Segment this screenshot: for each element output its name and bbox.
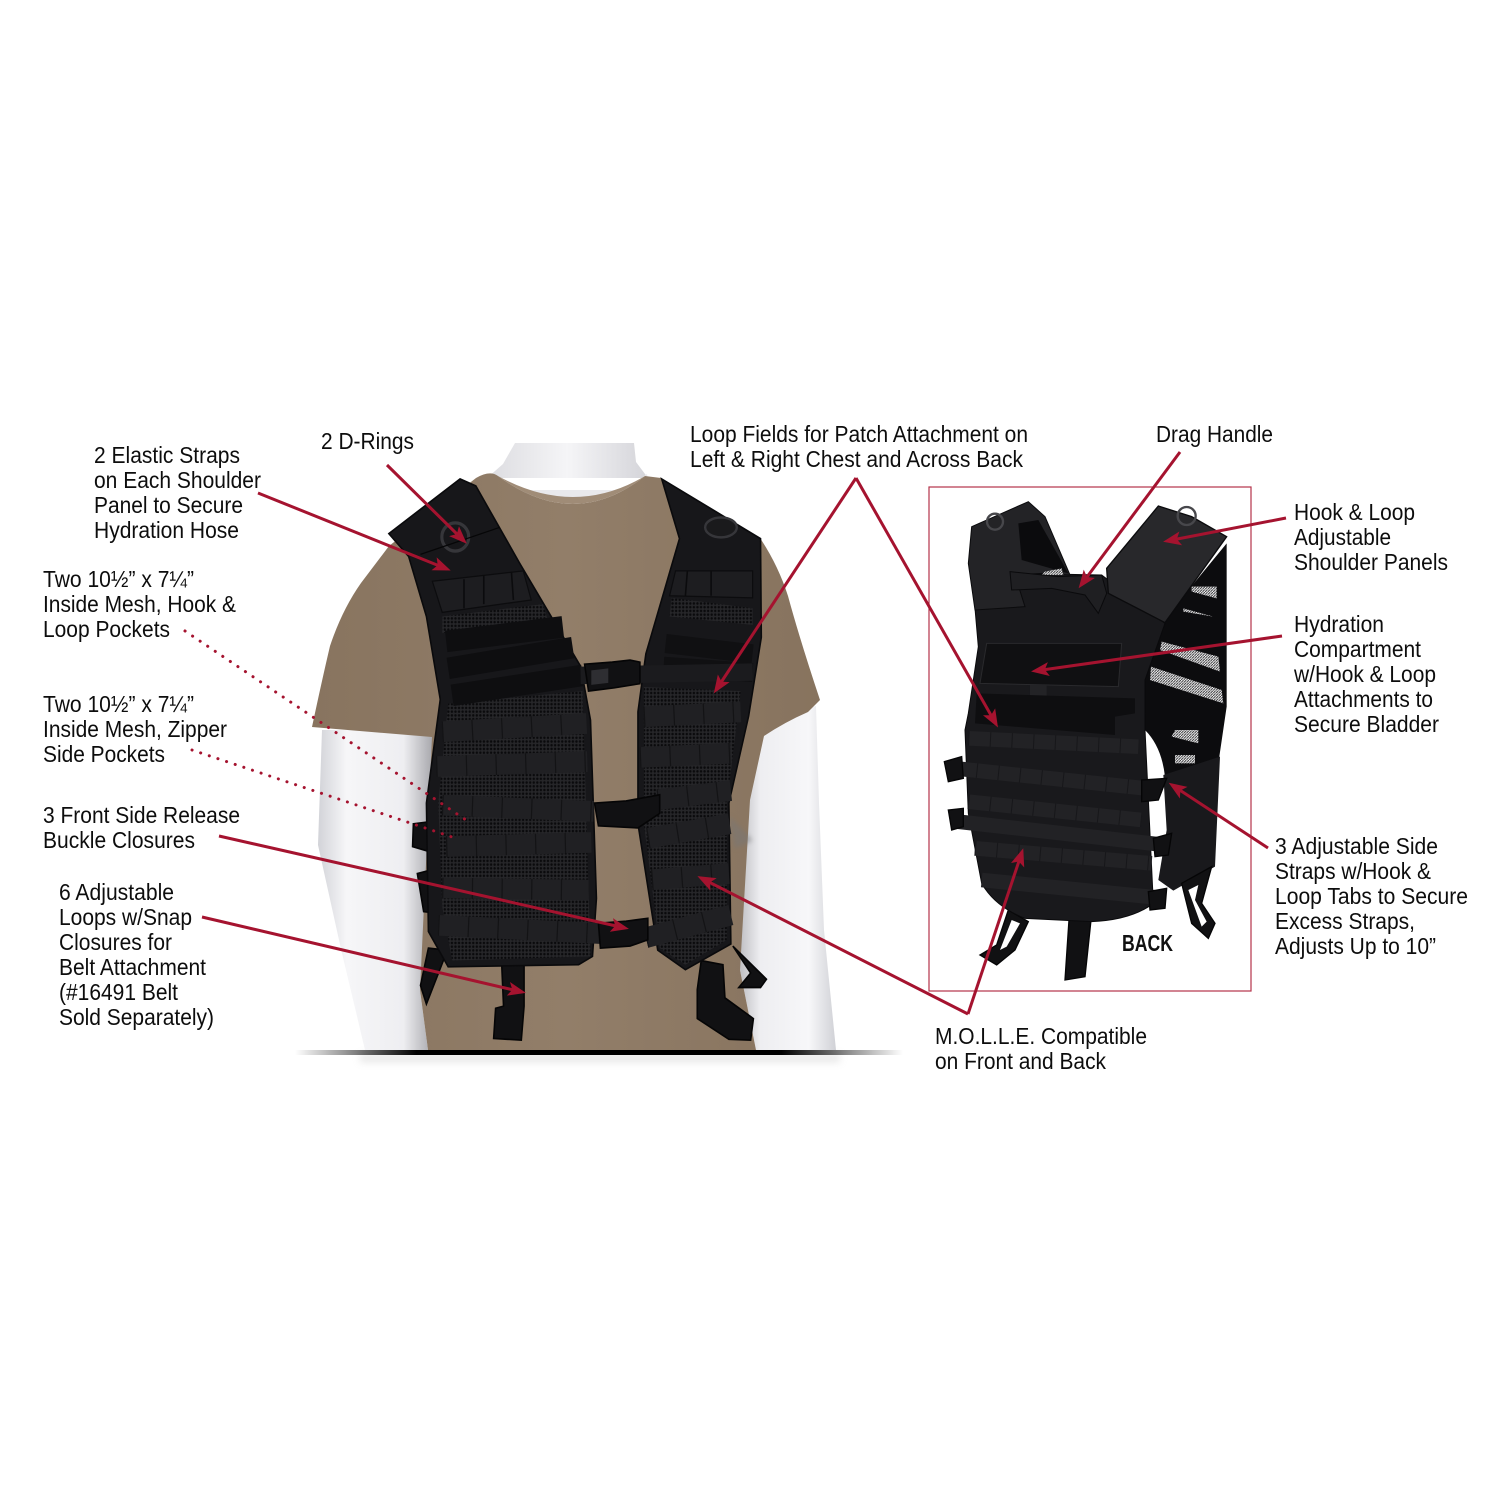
BACK label: BACK — [1122, 930, 1173, 956]
dotted leader: hook and loop pockets — [185, 631, 466, 820]
text: elastic straps: Hydration Hose — [94, 517, 239, 543]
text: mesh zipper pockets: Two 10½” x 7¼” — [43, 691, 194, 717]
arrow: M.O.L.L.E. — [701, 852, 1022, 1014]
t-shirt — [312, 473, 820, 1050]
text: side straps — [1275, 833, 1468, 959]
arrow: elastic straps — [258, 493, 447, 569]
back vest: M.O.L.L.E. webbing — [955, 738, 1165, 898]
text: hydration compartment: Attachments to — [1294, 686, 1433, 712]
text: side straps: 3 Adjustable Side — [1275, 833, 1438, 859]
arrow: D-rings — [387, 465, 464, 541]
text: buckle closures: 3 Front Side Release — [43, 802, 240, 828]
text: M.O.L.L.E.: on Front and Back — [935, 1048, 1106, 1074]
text: side straps: Excess Straps, — [1275, 908, 1415, 934]
back vest: left shoulder panel — [968, 502, 1070, 610]
text: side straps: Adjusts Up to 10” — [1275, 933, 1436, 959]
text: M.O.L.L.E.: M.O.L.L.E. Compatible — [935, 1023, 1147, 1049]
text: mesh hook and loop pockets: Inside Mesh, Hook & — [43, 591, 236, 617]
vest: chest strap and buckle — [581, 660, 753, 691]
text: mesh hook and loop pockets: Two 10½” x 7¼” — [43, 566, 194, 592]
text: hydration compartment — [1293, 611, 1439, 737]
arrow: loop fields — [716, 478, 996, 724]
text: adjustable loops: Sold Separately) — [59, 1004, 214, 1030]
arrow: hydration compartment — [1035, 636, 1282, 671]
text: adjustable loops — [59, 879, 214, 1030]
back vest: main body — [965, 573, 1165, 922]
text: mesh zipper pockets — [43, 691, 227, 767]
arrow: drag handle — [1081, 452, 1180, 585]
text: adjustable loops: Belt Attachment — [59, 954, 206, 980]
mannequin — [318, 443, 836, 1050]
vest: bottom buckle — [598, 918, 648, 948]
text: buckle closures: Buckle Closures — [43, 827, 195, 853]
text: hydration compartment: Secure Bladder — [1294, 711, 1439, 737]
back vest: right interior mesh — [1145, 543, 1227, 777]
text: hydration compartment: w/Hook & Loop — [1293, 661, 1436, 687]
front vest — [389, 479, 766, 1040]
text: side straps: Straps w/Hook & — [1275, 858, 1431, 884]
back vest: drag handle — [1010, 572, 1107, 613]
text: drag handle: Drag Handle — [1156, 421, 1273, 447]
back vest: side panel — [1158, 757, 1220, 891]
text: buckle closures — [43, 802, 240, 853]
vest: D-rings — [420, 517, 737, 554]
text: mesh hook and loop pockets: Loop Pockets — [43, 616, 170, 642]
vest: M.O.L.L.E. straps — [436, 712, 741, 938]
vest: mesh panels — [438, 598, 753, 965]
back vest: velcro patch — [975, 693, 1135, 735]
arrow: adjustable loops — [202, 917, 522, 992]
text: loop fields — [690, 421, 1028, 472]
vest: left front panel — [389, 479, 596, 967]
arrow: buckle closures — [219, 836, 625, 928]
back vest: side buckles — [944, 757, 1172, 910]
back vest: right shoulder panel — [1107, 506, 1227, 623]
back vest — [944, 502, 1227, 980]
vest: rear soft shadow — [729, 815, 753, 849]
text: side straps: Loop Tabs to Secure — [1275, 883, 1468, 909]
text: D-rings: 2 D-Rings — [321, 428, 414, 454]
dotted leader: zipper pockets — [192, 750, 458, 839]
text: shoulder panels — [1294, 499, 1448, 575]
text: elastic straps: Panel to Secure — [94, 492, 243, 518]
text: shoulder panels: Shoulder Panels — [1294, 549, 1448, 575]
text: elastic straps: on Each Shoulder — [94, 467, 261, 493]
text: mesh zipper pockets: Side Pockets — [43, 741, 165, 767]
back vest: bottom loops — [980, 867, 1215, 980]
vest: belt loops — [420, 946, 766, 1040]
text: adjustable loops: Closures for — [59, 929, 172, 955]
text: hydration compartment: Hydration — [1294, 611, 1384, 637]
back vest: velcro hydration flap — [980, 643, 1122, 700]
text: shoulder panels: Hook & Loop — [1294, 499, 1415, 525]
text: hydration compartment: Compartment — [1294, 636, 1421, 662]
text: elastic straps: 2 Elastic Straps — [94, 442, 240, 468]
arrow: shoulder panels — [1167, 518, 1286, 541]
text: loop fields: Loop Fields for Patch Attachment on — [690, 421, 1028, 447]
text: M.O.L.L.E. — [935, 1023, 1147, 1074]
text: adjustable loops: 6 Adjustable — [59, 879, 174, 905]
text: mesh hook and loop pockets — [43, 566, 236, 642]
vest: upper webbing — [432, 571, 753, 695]
text: shoulder panels: Adjustable — [1294, 524, 1391, 550]
text: adjustable loops: Loops w/Snap — [59, 904, 192, 930]
vest: side buckles — [413, 822, 436, 913]
text: mesh zipper pockets: Inside Mesh, Zipper — [43, 716, 227, 742]
text: loop fields: Left & Right Chest and Across Back — [690, 446, 1023, 472]
back view frame — [929, 487, 1251, 991]
arrow: side straps — [1172, 785, 1268, 848]
vest: right front panel — [638, 479, 761, 970]
text: elastic straps — [94, 442, 261, 543]
text: adjustable loops: (#16491 Belt — [59, 979, 178, 1005]
vest: middle buckle — [594, 795, 660, 828]
floor shadow line — [295, 1050, 903, 1062]
